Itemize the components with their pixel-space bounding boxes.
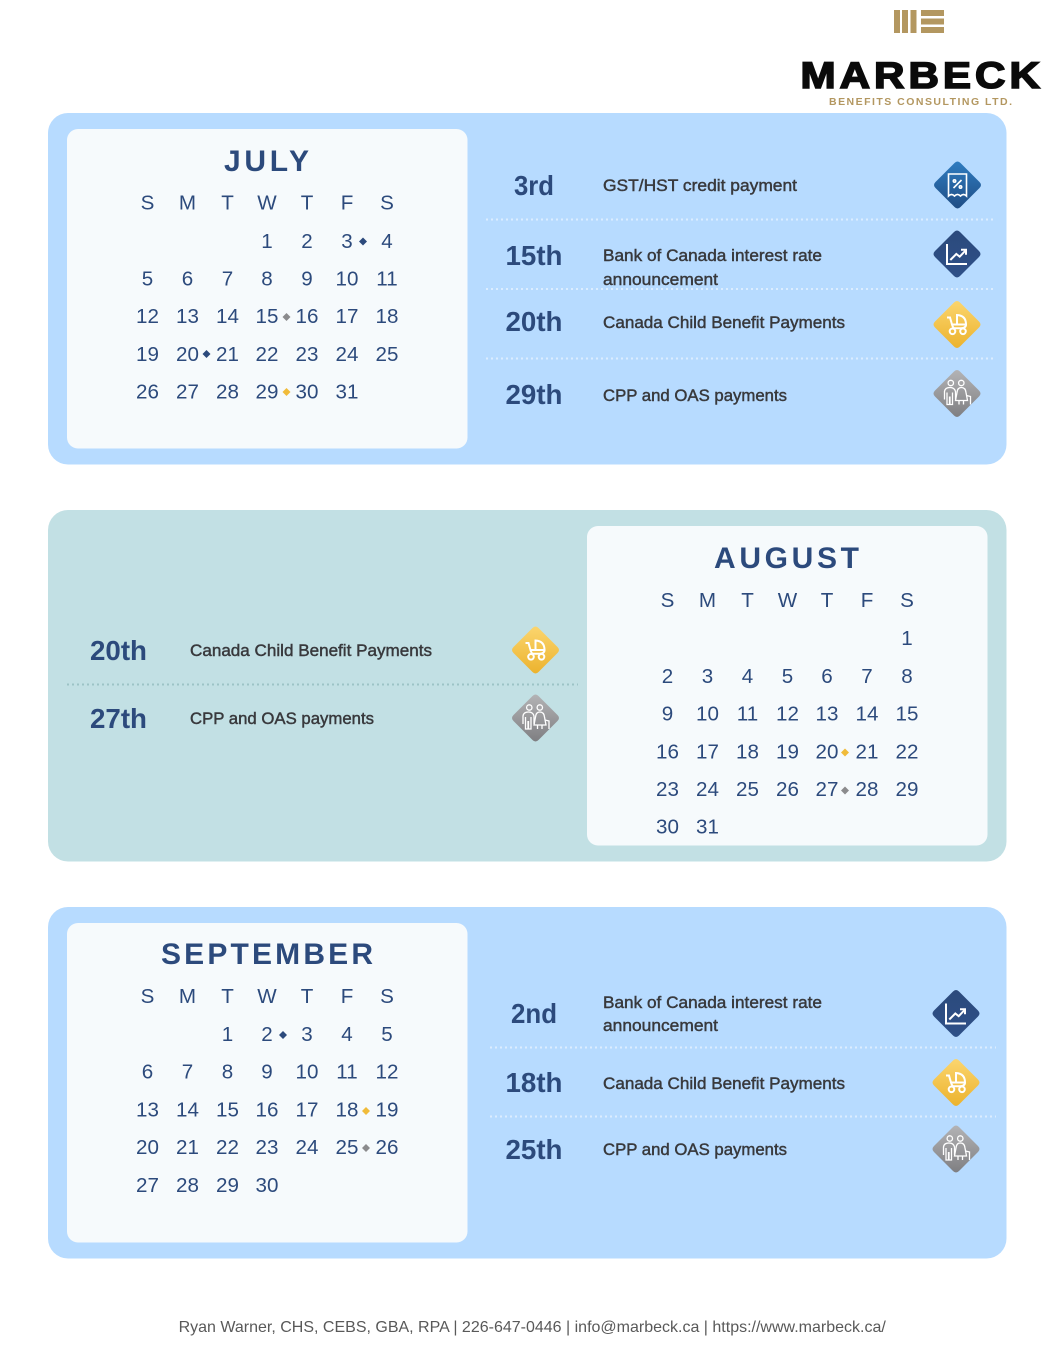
footer contact line: Ryan Warner, CHS, CEBS, GBA, RPA | 226-647-0446 | info@marbeck.ca | https://www.marbeck.ca/ <box>179 1319 886 1336</box>
July calendar grid: 1 <box>261 230 273 253</box>
September heading: SEPTEMBER <box>161 938 373 971</box>
July date markers <box>202 238 367 396</box>
September calendar grid: 30 <box>256 1174 278 1197</box>
September calendar grid: 14 <box>176 1098 199 1122</box>
panel: September <box>48 907 1006 1258</box>
September calendar grid: 25 <box>336 1136 358 1159</box>
September event: 25th <box>506 1126 980 1172</box>
September calendar grid: F <box>341 985 353 1008</box>
July calendar grid: 14 <box>216 305 239 328</box>
August event: 20th: 20th <box>90 635 147 666</box>
July calendar grid: S <box>141 192 154 214</box>
August calendar grid: 30 <box>656 816 679 838</box>
July calendar grid: 10 <box>336 268 358 290</box>
July event: 29th: 29th <box>506 379 562 410</box>
July calendar grid: T <box>301 192 314 214</box>
July calendar grid <box>136 192 398 404</box>
August calendar grid: 7 <box>861 665 873 688</box>
September calendar grid: 5 <box>381 1023 393 1046</box>
September calendar grid: 23 <box>256 1136 278 1159</box>
August calendar grid: 13 <box>816 702 838 726</box>
August calendar grid: 23 <box>656 778 679 801</box>
September event: 18th <box>506 1059 980 1106</box>
September event: 25th: 25th <box>506 1134 562 1165</box>
July calendar grid: 6 <box>182 268 193 290</box>
August calendar grid: 20 <box>816 740 838 764</box>
August calendar grid: 3 <box>702 665 713 688</box>
icon: stroller <box>512 626 559 674</box>
August calendar grid: 15 <box>896 702 918 726</box>
September calendar grid: 15 <box>216 1098 239 1122</box>
August calendar grid: 6 <box>821 665 833 688</box>
August event: 27th: CPP and OAS payments <box>190 709 374 728</box>
September event: 18th: Canada Child Benefit Payments <box>603 1074 845 1093</box>
August calendar grid: F <box>861 589 873 612</box>
August event: 27th <box>90 694 559 742</box>
September calendar grid: 20 <box>136 1136 159 1159</box>
August calendar grid: 24 <box>696 778 719 801</box>
July event: 29th <box>506 370 980 417</box>
July event: 3rd <box>514 162 981 208</box>
August event: 27th: 27th <box>90 703 147 734</box>
September event: 2nd: 2nd <box>511 998 557 1029</box>
August calendar grid <box>656 589 918 838</box>
logo: Marbeck <box>800 10 1040 108</box>
September calendar grid: 10 <box>296 1060 318 1084</box>
July calendar grid: 22 <box>256 343 278 366</box>
September calendar grid: T <box>301 985 314 1008</box>
August calendar grid: S <box>900 589 914 612</box>
July calendar grid: T <box>221 192 234 214</box>
icon: seniors <box>932 1126 980 1172</box>
August calendar grid: 28 <box>856 778 878 801</box>
July calendar grid: 19 <box>136 343 159 366</box>
September calendar grid: 22 <box>216 1136 239 1159</box>
July calendar grid: 7 <box>222 268 233 290</box>
July event: 15th <box>506 230 980 289</box>
August calendar grid: 11 <box>737 702 758 726</box>
September calendar card <box>67 923 468 1242</box>
July calendar grid: 26 <box>136 380 159 404</box>
July calendar grid: 21 <box>216 343 239 366</box>
July calendar grid: 27 <box>176 380 199 404</box>
September event: 18th: 18th <box>506 1067 562 1098</box>
September calendar grid: W <box>257 985 277 1008</box>
September event: 2nd: announcement <box>603 1016 718 1035</box>
August calendar grid: 5 <box>782 665 793 688</box>
July calendar grid: 29 <box>256 380 278 404</box>
icon: chart <box>934 230 980 278</box>
August calendar grid: M <box>699 589 716 612</box>
July event: 15th: 15th <box>506 240 562 271</box>
icon: stroller <box>934 301 980 348</box>
panel: July <box>48 113 1006 464</box>
September calendar grid: 12 <box>376 1060 398 1084</box>
August calendar grid: 10 <box>696 702 719 726</box>
icon: receipt <box>934 162 981 208</box>
September calendar grid: 7 <box>182 1060 193 1084</box>
icon: chart <box>932 990 980 1037</box>
August calendar grid: 18 <box>736 740 759 764</box>
September event: 25th: CPP and OAS payments <box>603 1140 787 1159</box>
September calendar grid: 3 <box>301 1023 313 1046</box>
August calendar grid: 8 <box>901 665 913 688</box>
August calendar grid: T <box>741 589 754 612</box>
July calendar grid: 3 <box>341 230 353 253</box>
August calendar grid: 17 <box>696 740 719 764</box>
July calendar grid: 24 <box>336 343 358 366</box>
September calendar grid: 11 <box>336 1060 358 1084</box>
July calendar grid: M <box>179 192 196 214</box>
panel: August <box>48 510 1006 862</box>
logo tagline: BENEFITS CONSULTING LTD. <box>829 96 1012 108</box>
July calendar grid: S <box>380 192 394 214</box>
September date markers <box>279 1031 370 1152</box>
icon: stroller <box>932 1059 980 1106</box>
July event: 20th: Canada Child Benefit Payments <box>603 313 845 332</box>
August calendar grid: 12 <box>776 702 799 726</box>
July calendar grid: 9 <box>301 268 313 290</box>
August event: 20th <box>90 626 559 674</box>
August calendar grid: 19 <box>776 740 799 764</box>
September calendar grid: M <box>179 985 196 1008</box>
July calendar grid: 11 <box>376 268 398 290</box>
September event: 2nd: Bank of Canada interest rate <box>603 993 822 1012</box>
September calendar grid: 13 <box>136 1098 159 1122</box>
July calendar grid: 17 <box>336 305 358 328</box>
August event: 20th: Canada Child Benefit Payments <box>190 641 432 660</box>
July calendar grid: 30 <box>296 380 318 404</box>
September calendar grid: 29 <box>216 1174 239 1197</box>
August calendar grid: S <box>661 589 674 612</box>
July calendar card <box>67 129 468 448</box>
July calendar grid: 20 <box>176 343 199 366</box>
July calendar grid: 4 <box>381 230 393 253</box>
September calendar grid: 2 <box>261 1023 273 1046</box>
August calendar grid: 29 <box>896 778 918 801</box>
August calendar grid: 26 <box>776 778 799 801</box>
August date markers <box>841 748 849 794</box>
September calendar grid: 1 <box>222 1023 233 1046</box>
July event: 3rd: GST/HST credit payment <box>603 176 797 195</box>
July calendar grid: 18 <box>376 305 398 328</box>
September calendar grid: 28 <box>176 1174 199 1197</box>
September calendar grid: 27 <box>136 1174 159 1197</box>
September calendar grid: 24 <box>296 1136 318 1159</box>
July calendar grid: 13 <box>176 305 199 328</box>
September calendar grid: S <box>380 985 394 1008</box>
July heading: JULY <box>224 145 309 178</box>
September calendar grid: 8 <box>222 1060 233 1084</box>
August calendar grid: T <box>821 589 834 612</box>
August calendar grid: 9 <box>662 702 673 726</box>
July calendar grid: 15 <box>256 305 278 328</box>
September calendar grid: 4 <box>341 1023 353 1046</box>
July event: 3rd: 3rd <box>514 170 554 201</box>
August calendar grid: 16 <box>656 740 679 764</box>
September calendar grid: 19 <box>376 1098 398 1122</box>
August calendar grid: 21 <box>856 740 878 764</box>
August calendar grid: 4 <box>742 665 753 688</box>
September calendar grid: 21 <box>176 1136 199 1159</box>
July calendar grid: 31 <box>336 380 358 404</box>
July calendar grid: 16 <box>296 305 318 328</box>
icon: seniors <box>934 370 980 417</box>
August calendar grid: 14 <box>856 702 878 726</box>
September calendar grid: S <box>141 985 154 1008</box>
August heading: AUGUST <box>714 542 859 575</box>
September calendar grid: T <box>221 985 234 1008</box>
July calendar grid: 2 <box>301 230 313 253</box>
July calendar grid: 25 <box>376 343 398 366</box>
September event: 2nd <box>511 990 980 1037</box>
July calendar grid: W <box>257 192 277 214</box>
July event: 20th <box>506 301 980 348</box>
September calendar grid: 18 <box>336 1098 358 1122</box>
icon: seniors <box>512 694 559 742</box>
July calendar grid: 23 <box>296 343 318 366</box>
July calendar grid: 5 <box>142 268 153 290</box>
September calendar grid <box>136 985 398 1197</box>
September calendar grid: 9 <box>261 1060 273 1084</box>
July calendar grid: 12 <box>136 305 159 328</box>
September calendar grid: 6 <box>142 1060 153 1084</box>
August calendar grid: 27 <box>816 778 838 801</box>
July calendar grid: 8 <box>261 268 273 290</box>
July calendar grid: 28 <box>216 380 239 404</box>
July event: 29th: CPP and OAS payments <box>603 386 787 405</box>
August calendar grid: 1 <box>901 627 913 650</box>
August calendar grid: 25 <box>736 778 759 801</box>
September calendar grid: 16 <box>256 1098 278 1122</box>
logo wordmark: MARBECK <box>800 55 1040 96</box>
August calendar grid: W <box>778 589 798 612</box>
September calendar grid: 17 <box>296 1098 318 1122</box>
August calendar grid: 2 <box>662 665 673 688</box>
July calendar grid: F <box>341 192 353 214</box>
August calendar card <box>587 526 988 846</box>
August calendar grid: 31 <box>696 816 719 838</box>
July event: 15th: announcement <box>603 270 718 289</box>
August calendar grid: 22 <box>896 740 918 764</box>
July event: 20th: 20th <box>506 306 562 337</box>
September calendar grid: 26 <box>376 1136 398 1159</box>
logo mark <box>894 10 944 33</box>
July event: 15th: Bank of Canada interest rate <box>603 246 822 265</box>
